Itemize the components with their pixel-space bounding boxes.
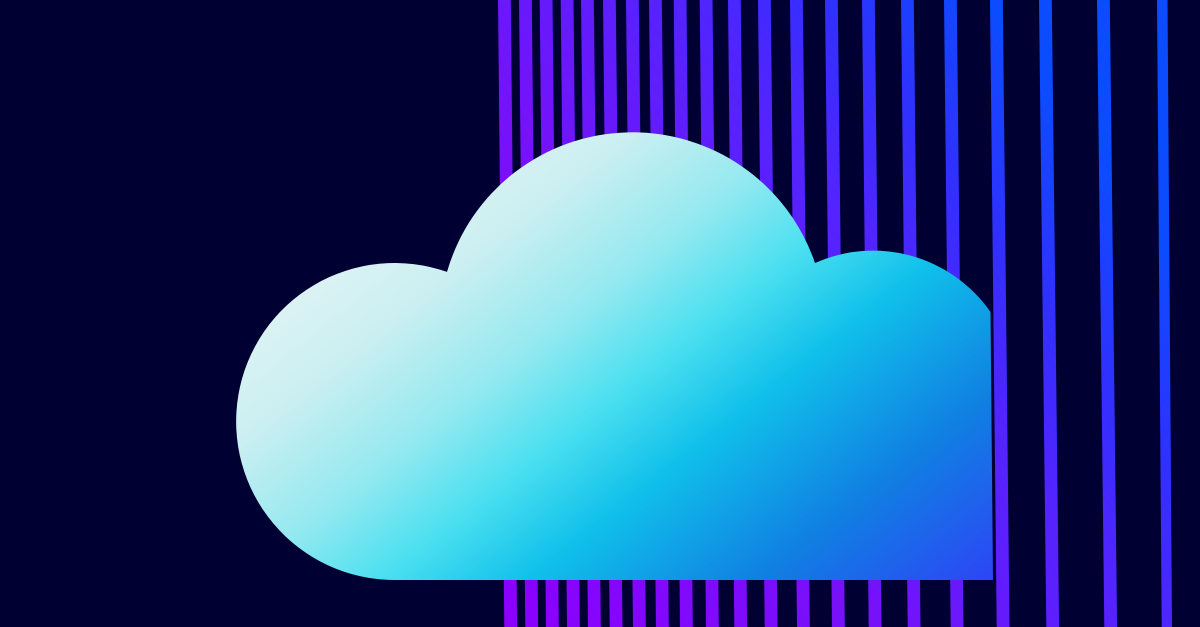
vertical gradient stripes [498, 0, 1172, 627]
cloud [236, 132, 993, 580]
